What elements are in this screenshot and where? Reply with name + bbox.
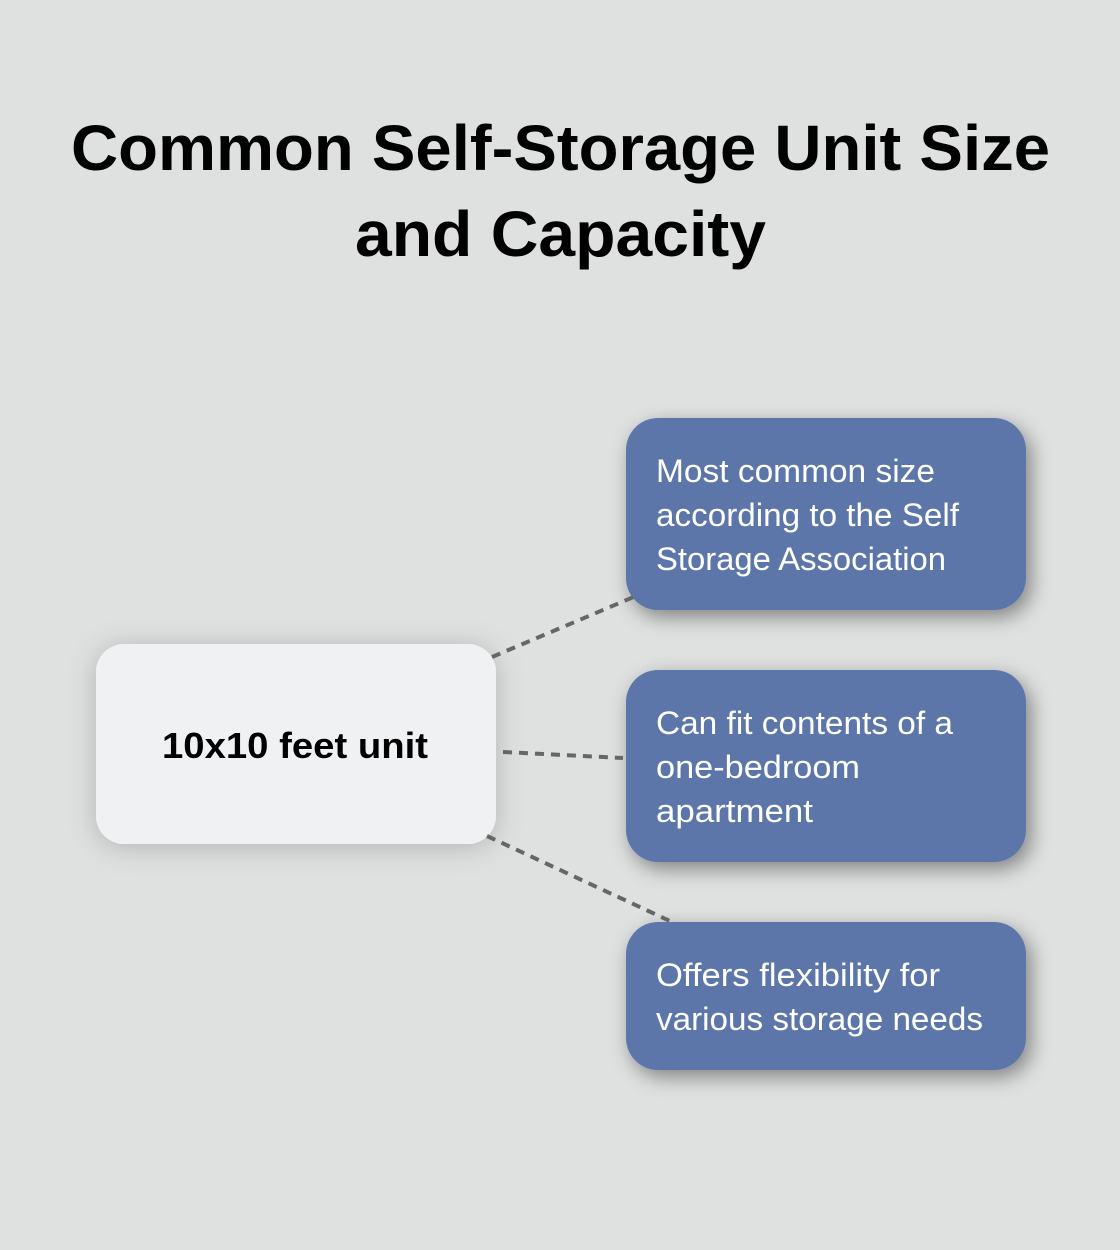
central box: 10x10 feet unit: 10x10 feet unit [162,725,428,766]
panel: most common size: Most common size [656,453,935,489]
central box: 10x10 feet unit [96,644,496,844]
panel: one-bedroom apartment [626,670,1026,862]
panel: flexibility: various storage needs [656,1001,983,1037]
connector: bottom [487,836,672,922]
panel: flexibility [626,922,1026,1070]
connector: middle [503,752,623,758]
panel: one-bedroom apartment: one-bedroom [656,749,860,785]
connector: top [492,596,636,657]
panel: most common size: Storage Association [656,541,946,577]
panel: most common size: according to the Self [656,497,959,533]
title: and Capacity [355,198,766,270]
panel: one-bedroom apartment: apartment [656,793,813,829]
panel: most common size [626,418,1026,610]
title: Common Self-Storage Unit Size [71,112,1050,184]
panel: one-bedroom apartment: Can fit contents of a [656,705,953,741]
title [71,112,1050,270]
panel: flexibility: Offers flexibility for [656,957,940,993]
